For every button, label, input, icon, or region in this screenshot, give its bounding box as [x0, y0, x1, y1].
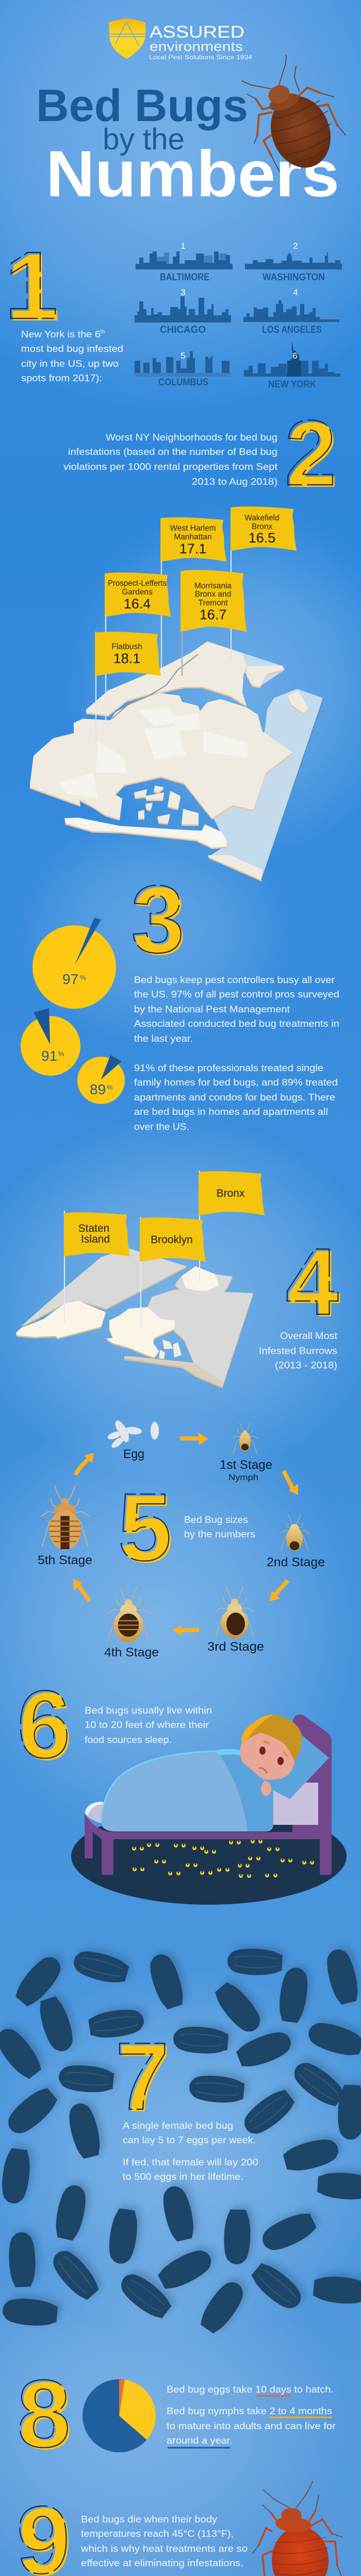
- flag: West Harlem Manhattan: West Harlem: [170, 524, 216, 533]
- text: worst neighborhoods: infestations (based on the number of Bed bug: [68, 447, 277, 457]
- arrow: 4th to 5th stage: [73, 1579, 90, 1601]
- pie: 97 percent: 97: [62, 971, 78, 987]
- flag: Flatbush: Flatbush: [111, 642, 142, 651]
- icon: brown bed bug: [242, 55, 346, 176]
- number 7: 7: [118, 2025, 171, 2132]
- flag: West Harlem Manhattan: 17.1: [179, 541, 206, 556]
- skyline: Chicago: CHICAGO: [160, 325, 206, 335]
- skyline: New York: 6: [292, 351, 298, 361]
- text: pest controllers: family homes for bed bugs, and 89% treated: [134, 1077, 338, 1088]
- map: boroughs: [16, 1248, 253, 1387]
- glowing eyes under bed: [132, 1839, 314, 1878]
- label: 2nd stage: 2nd Stage: [267, 1555, 325, 1569]
- text: most infested boroughs: Infested Burrows: [259, 1346, 337, 1356]
- flag: Morrisania Bronx and Tremont: [180, 570, 247, 632]
- flag: Morrisania Bronx and Tremont: 16.7: [200, 607, 226, 622]
- flag: Wakefield Bronx: Bronx: [252, 522, 272, 531]
- number 5: 5: [118, 1474, 171, 1581]
- number 5: 5: [120, 1476, 173, 1583]
- label: 1st stage: 1st Stage: [220, 1458, 272, 1472]
- number 3: 3: [131, 866, 184, 973]
- icon: 2nd stage nymph: [280, 1515, 309, 1551]
- flag: Prospect-Lefferts Gardens: Gardens: [122, 588, 153, 597]
- arrow: 3rd to 4th stage: [172, 1625, 199, 1636]
- flag: Prospect-Lefferts Gardens: 16.4: [124, 596, 151, 612]
- number 8: 8: [17, 2361, 70, 2467]
- text: hatch and mature times: Bed bug nymphs take 2 to 4 months: [167, 2406, 332, 2416]
- logo: top: Local Pest Solutions Since 1934: [149, 55, 253, 61]
- flag: Brooklyn: [140, 1217, 206, 1262]
- text: eggs per week: A single female bed bug: [123, 2121, 233, 2131]
- skyline: Los Angeles: LOS ANGELES: [262, 325, 322, 335]
- text: worst neighborhoods: violations per 1000 rental properties from Sept: [63, 462, 277, 472]
- icon: 5th stage nymph: [41, 1485, 89, 1550]
- pie: 97 percent: %: [80, 974, 86, 981]
- number 4: 4: [288, 1230, 340, 1336]
- arrow: 1st to 2nd stage: [284, 1471, 298, 1495]
- icon: 4th stage nymph: [107, 1587, 150, 1642]
- label: 3rd stage: 3rd Stage: [207, 1640, 264, 1654]
- flag: Bronx: [199, 1171, 265, 1215]
- skyline: Baltimore: 1: [180, 241, 186, 251]
- logo: top: environments: [150, 39, 243, 54]
- flag: Wakefield Bronx: [231, 506, 297, 551]
- pie: 97 percent: [32, 918, 116, 1009]
- number 2: 2: [285, 401, 336, 505]
- text: live within 10 to 20 feet: Bed bugs usually live within: [85, 1705, 212, 1716]
- skyline: Chicago: 3: [180, 287, 186, 297]
- flag: Bronx: Bronx: [217, 1188, 245, 1199]
- flag: Flatbush: 18.1: [113, 651, 140, 666]
- text: eggs per week: If fed, that female will lay 200: [123, 2157, 258, 2167]
- illustration: bed with person and bugs: [71, 1715, 347, 1905]
- flag: Wakefield Bronx: 16.5: [249, 530, 275, 546]
- logo: top: [109, 19, 253, 61]
- skyline: Baltimore: [136, 241, 233, 283]
- text: live within 10 to 20 feet: food sources sleep.: [85, 1735, 172, 1745]
- flag: West Harlem Manhattan: Manhattan: [174, 533, 212, 541]
- flag: Staten Island: Staten: [78, 1223, 109, 1234]
- text: eggs per week: can lay 5 to 7 eggs per week.: [123, 2135, 256, 2145]
- skyline: Chicago: [135, 287, 231, 335]
- number 6: 6: [17, 1671, 70, 1778]
- map: New York neighborhoods: [30, 641, 323, 880]
- skyline: Columbus: COLUMBUS: [158, 377, 208, 388]
- text: bed bug sizes: by the numbers: [184, 1529, 255, 1539]
- skyline: Baltimore: BALTIMORE: [160, 272, 209, 283]
- egg field: [0, 1946, 361, 2336]
- number 8: 8: [19, 2363, 72, 2469]
- skyline: Washington: [245, 241, 342, 283]
- title: [36, 80, 339, 210]
- text: hatch and mature times: Bed bug eggs take 10 days to hatch.: [167, 2384, 334, 2395]
- pie: 89 percent: %: [107, 1083, 113, 1091]
- number 3: 3: [133, 868, 186, 975]
- text: New York ranking: th: [101, 329, 105, 335]
- pie: life stages: [83, 2379, 156, 2452]
- flag: Prospect-Lefferts Gardens: Prospect-Lefferts: [108, 579, 167, 588]
- skyline: Los Angeles: 4: [293, 287, 298, 297]
- text: eggs per week: [123, 2121, 258, 2182]
- arrow: 5th stage to egg: [75, 1453, 94, 1475]
- flag: Morrisania Bronx and Tremont: Morrisania: [194, 582, 232, 590]
- skyline: Washington: WASHINGTON: [262, 272, 325, 283]
- pie: 89 percent: 89: [90, 1081, 106, 1097]
- text: live within 10 to 20 feet: 10 to 20 feet of where their: [85, 1720, 209, 1730]
- label: egg: Egg: [123, 1447, 144, 1461]
- text: New York ranking: New York is the 6: [21, 329, 101, 340]
- text: pest controllers: are bed bugs in homes and apartments all: [134, 1107, 328, 1117]
- text: heat treatments: [80, 2514, 248, 2568]
- icon: 1st stage nymph: [232, 1422, 258, 1454]
- icon: eggs: [107, 1419, 159, 1450]
- skyline: Los Angeles: [243, 287, 339, 335]
- flag: Staten Island: [64, 1212, 130, 1257]
- text: hatch and mature times: around a year.: [167, 2435, 233, 2446]
- skyline: Columbus: 5: [180, 351, 186, 361]
- number 2: 2: [287, 403, 338, 507]
- text: bed bug sizes: Bed Bug sizes: [184, 1515, 248, 1525]
- icon: red bed bug: [253, 2482, 342, 2576]
- text: pest controllers: Bed bugs keep pest controllers busy all over: [134, 975, 335, 985]
- label: 1st stage: [220, 1458, 272, 1482]
- text: worst neighborhoods: 2013 to Aug 2018): [192, 477, 277, 487]
- egg field shadows: [0, 1943, 361, 2333]
- text: pest controllers: over the US.: [134, 1122, 189, 1132]
- text: bed bug sizes: [184, 1515, 255, 1539]
- text: heat treatments: effective at eliminating infestations.: [81, 2558, 243, 2568]
- text: pest controllers: Associated conducted bed bug treatments in: [134, 1019, 339, 1029]
- text: heat treatments: temperatures reach 45°C (113°F),: [81, 2529, 234, 2539]
- flag: Wakefield Bronx: Wakefield: [244, 514, 280, 522]
- flag: West Harlem Manhattan: [160, 517, 226, 562]
- text: worst neighborhoods: [63, 432, 277, 487]
- text: pest controllers: [134, 975, 339, 1132]
- skyline: Washington: 2: [293, 241, 298, 251]
- arrow: 2nd to 3rd stage: [269, 1581, 288, 1601]
- text: New York ranking: [21, 329, 123, 383]
- text: heat treatments: which is why heat treatments are so: [80, 2544, 248, 2554]
- number 7: 7: [116, 2023, 169, 2130]
- number 1: 1: [7, 234, 60, 341]
- label: 4th stage: 4th Stage: [104, 1646, 159, 1659]
- text: New York ranking: spots from 2017):: [21, 373, 102, 383]
- flag: Brooklyn: Brooklyn: [151, 1234, 193, 1246]
- pie: 89 percent: [77, 1055, 125, 1104]
- flag: Morrisania Bronx and Tremont: Tremont: [198, 599, 228, 607]
- number 1: 1: [5, 232, 58, 339]
- text: eggs per week: to 500 eggs in her lifetime.: [123, 2172, 243, 2182]
- text: worst neighborhoods: Worst NY Neighborhoods for bed bug: [106, 432, 277, 443]
- pie: 91 percent: [21, 1008, 80, 1076]
- flag: Prospect-Lefferts Gardens: [105, 572, 171, 617]
- text: pest controllers: 91% of these professionals treated single: [134, 1063, 323, 1073]
- skyline: Columbus: [135, 351, 231, 388]
- number 6: 6: [19, 1673, 72, 1780]
- skyline: New York: [244, 341, 340, 390]
- text: pest controllers: the last year.: [134, 1033, 193, 1044]
- text: live within 10 to 20 feet: [85, 1705, 212, 1745]
- text: most infested boroughs: Overall Most: [280, 1331, 337, 1341]
- number 4: 4: [286, 1228, 338, 1334]
- title: Numbers: [46, 137, 339, 210]
- text: New York ranking: most bed bug infested: [21, 344, 123, 354]
- arrow: egg to 1st stage: [180, 1432, 208, 1445]
- text: most infested boroughs: (2013 - 2018): [275, 1360, 337, 1370]
- title: Bed Bugs: [36, 80, 248, 131]
- text: pest controllers: the US. 97% of all pest control pros surveyed: [134, 989, 339, 999]
- text: pest controllers: apartments and condos for bed bugs. There: [134, 1092, 335, 1103]
- flag poles: [96, 546, 231, 742]
- text: heat treatments: Bed bugs die when their body: [81, 2514, 217, 2524]
- pie: 91 percent: %: [58, 1050, 64, 1058]
- flag: Staten Island: Island: [81, 1233, 110, 1245]
- icon: 3rd stage nymph: [215, 1587, 254, 1638]
- flag poles: boroughs: [64, 1171, 200, 1328]
- logo: top: ASSURED: [150, 23, 244, 41]
- label: 5th stage: 5th Stage: [38, 1553, 92, 1567]
- pie: 91 percent: 91: [41, 1048, 57, 1064]
- label: 1st stage: Nymph: [228, 1472, 258, 1482]
- text: pest controllers: by the National Pest Management: [134, 1004, 290, 1014]
- flag: Morrisania Bronx and Tremont: Bronx and: [195, 590, 231, 599]
- skyline: New York: NEW YORK: [268, 379, 316, 390]
- title: by the: [103, 123, 185, 156]
- text: hatch and mature times: [167, 2384, 336, 2448]
- text: most infested boroughs: [259, 1331, 337, 1370]
- text: hatch and mature times: to mature into adults and can live for: [167, 2421, 336, 2431]
- flag: Flatbush: [95, 632, 161, 676]
- text: New York ranking: city in the US, up two: [21, 359, 119, 369]
